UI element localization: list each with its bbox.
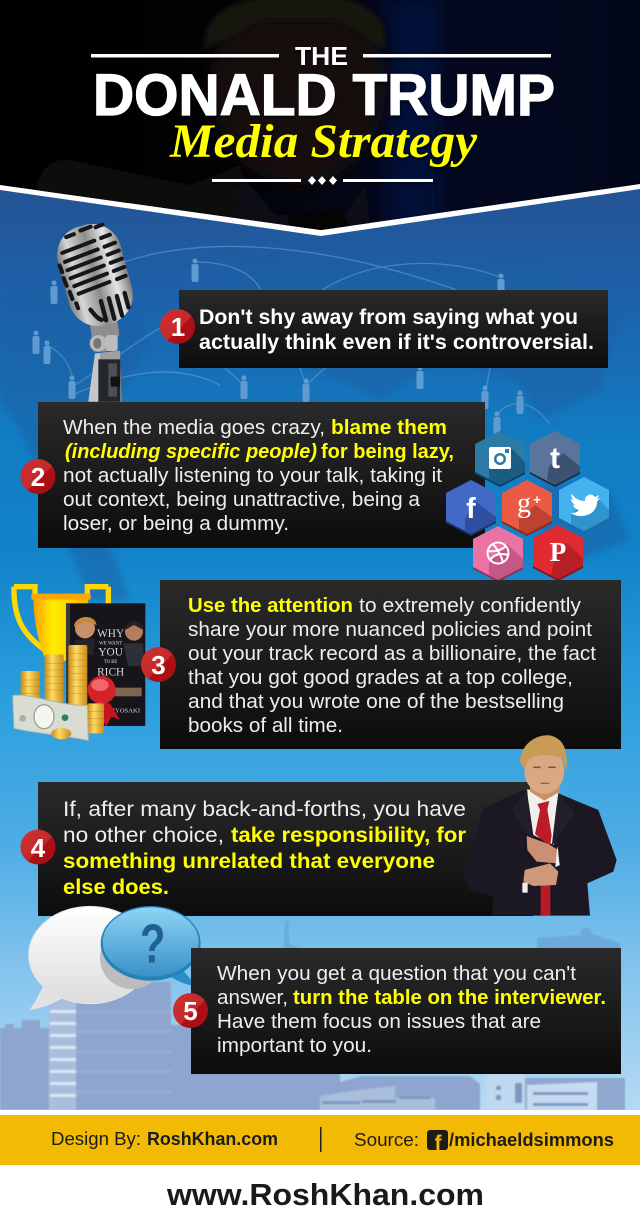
title line: THE [91,41,551,71]
tip 1 text [199,306,594,354]
icon: facebook [446,480,496,536]
source credit: f [434,1132,442,1155]
tip 5 text [217,963,606,1057]
icon: facebook: f [466,493,476,525]
icon: google plus: + [533,492,541,507]
tip 3 text: that you got good grades at a top college, [188,667,573,689]
panel: tip 3 [141,580,621,749]
blue question bubble [101,906,201,987]
badge 5 [173,993,208,1028]
tip 2 text: When the media goes crazy, [63,417,325,439]
tip 3 text: to extremely confidently [359,595,581,617]
panel: tip 1 [160,290,608,368]
icon: tumblr: t [550,442,560,475]
tip 5 text: Have them focus on issues that are [217,1011,541,1033]
book [66,603,145,726]
badge 1: 1 [171,312,185,342]
book: RICH [97,666,124,678]
book: WHY [97,628,124,640]
icon: social media hexagons [446,431,609,582]
tip 4 text: take responsibility, for [231,823,467,847]
title [91,41,555,185]
tip 3 text: out your track record as a billionaire, the fact [188,643,596,665]
ribbon [88,676,120,727]
tip 2 text: out context, being unattractive, being a [63,489,421,511]
tip 4 text: If, after many back-and-forths, you have [63,797,466,821]
world map with network of people [0,246,630,600]
book: TO BE [104,660,117,665]
blue sky background [0,180,640,1110]
source credit: /michaeldsimmons [449,1130,614,1150]
badge 3: 3 [151,650,166,680]
title line: THE: THE [295,41,348,71]
book: WE WANT [99,642,122,647]
tip 4 text: no other choice, [63,823,224,847]
book: KIYOSAKI [108,707,140,714]
icon: dribbble [473,526,523,582]
source credit: Source: [354,1130,419,1150]
panel: tip 4 [20,782,533,916]
money [13,695,88,741]
tip 4 text: something unrelated that everyone [63,849,435,873]
panel: tip 2 [20,402,485,548]
badge 2 [20,459,56,494]
badge 1 [160,309,195,344]
tip 4 text [63,797,467,899]
white speech bubble [29,906,163,1010]
tip 4 text: else does. [63,875,169,899]
book: YOU [98,647,123,659]
tip 2 text [63,417,454,535]
icon: pinterest [533,525,583,581]
panel: tip 5 [173,948,621,1074]
tip 5 text: answer, [217,987,288,1009]
tip 1 text: Don't shy away from saying what you [199,306,578,329]
tip 3 text: share your more nuanced policies and point [188,619,592,641]
icon: instagram [475,431,525,487]
icon: microphone [48,217,140,402]
badge 4: 4 [31,833,46,863]
icon: pinterest: P [550,537,566,567]
icon: tumblr [530,431,580,487]
tip 3 text: Use the attention [188,595,353,617]
icon: twitter [559,477,609,533]
title divider with diamonds [212,176,433,185]
icon: google plus: g [517,488,531,519]
design credit: Design By: [51,1129,141,1149]
tip 3 text: and that you wrote one of the bestselling [188,691,564,713]
design credit [51,1129,278,1149]
header photo banner [0,0,640,240]
blue question bubble: ? [140,913,165,975]
footer credit bar [0,1110,640,1165]
tip 2 text: not actually listening to your talk, taking it [63,465,442,487]
badge 2: 2 [31,462,45,492]
source credit [354,1130,614,1155]
design credit: RoshKhan.com [147,1129,278,1149]
website url: www.RoshKhan.com [166,1177,484,1212]
icon: trophy, book and money [13,587,145,741]
tip 2 text: (including specific people) [65,441,317,463]
tip 2 text: blame them [331,417,447,439]
tip 5 text: When you get a question that you can't [217,963,576,985]
tip 2 text: loser, or being a dummy. [63,513,289,535]
city skyline [0,921,625,1110]
title line: Donald Trump: DONALD TRUMP [93,63,555,128]
icon: google plus [502,480,552,536]
tip 3 text [188,595,596,737]
icon: speech bubbles [29,906,201,1010]
title line: Media Strategy: Media Strategy [169,115,478,168]
icon: Donald Trump in suit [463,735,617,916]
tip 3 text: books of all time. [188,715,343,737]
badge 3 [141,647,176,682]
coins [21,645,104,733]
badge 4 [20,830,56,864]
tip 5 text: turn the table on the interviewer. [293,987,606,1009]
badge 5: 5 [183,996,198,1026]
tip 2 text: for being lazy, [321,441,454,463]
tip 5 text: important to you. [217,1035,372,1057]
tip 1 text: actually think even if it's controversial. [199,331,594,354]
